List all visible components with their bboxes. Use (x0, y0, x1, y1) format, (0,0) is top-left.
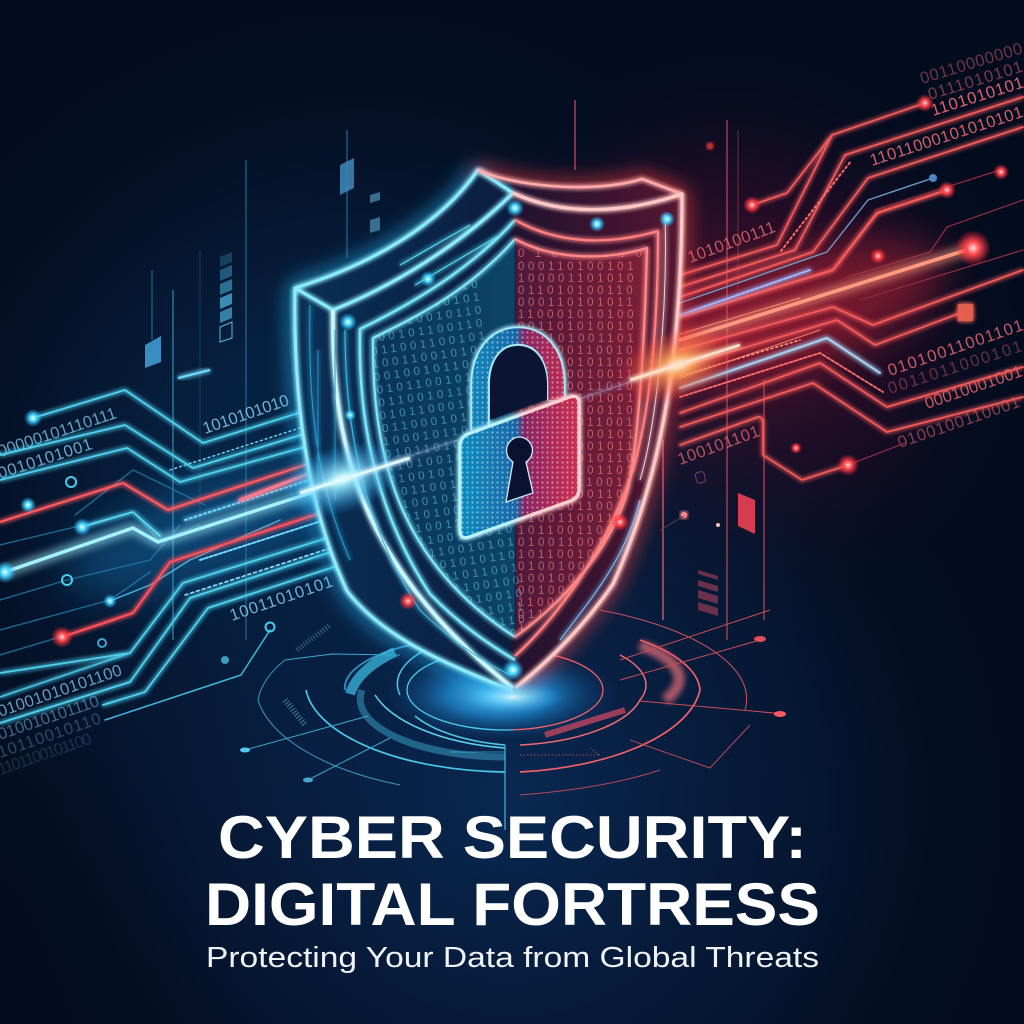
binary panel: 010011001011 (518, 441, 636, 453)
binary panel: 1100100110100101 (326, 291, 484, 325)
binary panel: 1001011001011000 (338, 381, 497, 415)
binary panel: 011001010011 (518, 609, 636, 621)
shield light dots (339, 199, 675, 681)
binary panel: 001001101001 (518, 393, 637, 405)
binary panel: 101100101100 (518, 357, 636, 369)
binary panel: 000110101011 (518, 297, 636, 309)
binary panel: 1001011000101101 (342, 407, 500, 441)
binary panel: 1010110010010110 (371, 613, 529, 647)
binary panel: 010011001100 (518, 513, 636, 525)
subtitle: Protecting Your Data from Global Threats (206, 942, 819, 974)
binary panel: 110010110010 (518, 477, 636, 489)
binary panel: 1001011001100101 (331, 330, 489, 364)
right binary streams: 0100100110001 (895, 393, 1022, 452)
shield glow (295, 170, 682, 691)
right binary streams (675, 40, 1024, 469)
light streak (345, 365, 680, 478)
binary panel: 100110100110 (518, 405, 636, 417)
binary panel: 001101010010 (518, 321, 637, 333)
circuit nodes (0, 94, 1009, 664)
binary panel: 100101001100 (518, 621, 637, 633)
binary panel: 1001100101011001 (363, 561, 522, 595)
binary panel: 101100110011 (518, 501, 635, 513)
binary panel: 0 1 0 0 1 1 0 0 1 (518, 248, 662, 260)
binary panel: 0011001010011001 (354, 497, 513, 531)
binary panel: 0010110100101100 (347, 446, 506, 480)
right server elements (575, 100, 973, 640)
padlock (460, 336, 579, 538)
right binary streams: 01010011001101 (885, 317, 1024, 380)
padlock body (460, 396, 579, 538)
binary panel: 0100101100101001 (351, 471, 510, 505)
binary panel: 1001010110010010 (367, 587, 526, 621)
shield outlines red (478, 170, 682, 688)
binary panel: 0101011001001011 (369, 600, 527, 634)
right binary streams: 100101101 (675, 422, 762, 469)
binary panel: 1011010010110010 (349, 458, 507, 492)
binary panel (374, 241, 646, 636)
binary panel: 000110010011 (518, 369, 636, 381)
binary panel: 001100101101 (518, 465, 636, 477)
binary panel: 011000110010 (518, 345, 636, 357)
binary panel: 1100101001100110 (356, 510, 514, 544)
right binary streams: 0011011000101 (886, 337, 1024, 398)
binary panel: 110011001010 (518, 597, 636, 609)
title (205, 804, 820, 938)
binary panel: 1100010110100101 (345, 433, 504, 467)
left circuit lines (0, 390, 345, 723)
binary panel: 000110100101 (518, 261, 637, 273)
title: DIGITAL FORTRESS (205, 871, 820, 938)
binary panel: 101100110011 (518, 525, 635, 537)
right binary streams: 00010001001 (922, 363, 1024, 413)
right binary streams: 1010100111 (685, 218, 778, 267)
right circuit lines (680, 97, 1023, 480)
right binary streams: 0111010101 (926, 58, 1024, 104)
right binary streams: 00110000000 (918, 40, 1024, 88)
binary panel: 0101100010110100 (344, 420, 502, 454)
padlock shackle (480, 336, 556, 430)
binary panel: 1011001001011001 (335, 355, 493, 389)
binary panel: 100110010110 (518, 453, 636, 465)
binary panel: 0101100100101101 (373, 626, 531, 660)
binary panel: 0110100101100110 (329, 317, 487, 351)
binary panel: 0101001100110010 (358, 523, 516, 557)
binary panel: 1010010110010011 (322, 265, 480, 299)
right binary streams: 11011000101010101 (868, 103, 1024, 170)
shield body (295, 170, 682, 691)
right binary streams: 1101010101 (929, 74, 1024, 120)
binary panel: 100100110010 (518, 573, 637, 585)
title: CYBER SECURITY: (218, 804, 807, 871)
light flares (273, 312, 748, 713)
binary panel: 0110010110001011 (340, 394, 497, 428)
left binary streams: 10011010101 (227, 573, 335, 625)
binary panel: 001001100101 (518, 585, 637, 597)
binary panel: 1001100110010101 (360, 536, 518, 570)
shield outlines blue (295, 170, 515, 691)
shield (295, 170, 682, 691)
binary panel: 1001011010010110 (318, 240, 477, 274)
binary panel: 101001100101 (518, 429, 637, 441)
binary panel: 0110010101100100 (365, 574, 524, 608)
left binary streams (0, 391, 335, 779)
binary panel: 101100100110 (518, 549, 636, 561)
keyhole (506, 437, 533, 502)
binary panel: 011010100110 (518, 285, 636, 297)
binary panel: 010010011001 (518, 561, 637, 573)
binary panel: 0010110010011010 (324, 278, 482, 312)
binary panel: 0110011001010110 (362, 549, 519, 582)
binary panel: 0101100110010100 (333, 343, 491, 377)
binary panel: 1010011010010110 (327, 304, 486, 338)
binary panel: 0010010110010110 (336, 368, 495, 402)
binary panel: 110001010100 (518, 309, 637, 321)
binary panel: 1010110010100110 (353, 484, 511, 518)
binary panel: 100101001101 (518, 333, 637, 345)
binary panel: 110010011010 (518, 381, 636, 393)
binary panel: 100001101010 (518, 273, 637, 285)
left server elements (145, 130, 380, 640)
binary panel: 001011001100 (518, 489, 636, 501)
binary panel: 010011001001 (518, 537, 637, 549)
binary panel: 011010011001 (518, 417, 636, 429)
binary panel: 0110100101100101 (320, 252, 478, 286)
radar base rings (240, 610, 786, 830)
left binary streams: 1010101010 (200, 391, 291, 438)
